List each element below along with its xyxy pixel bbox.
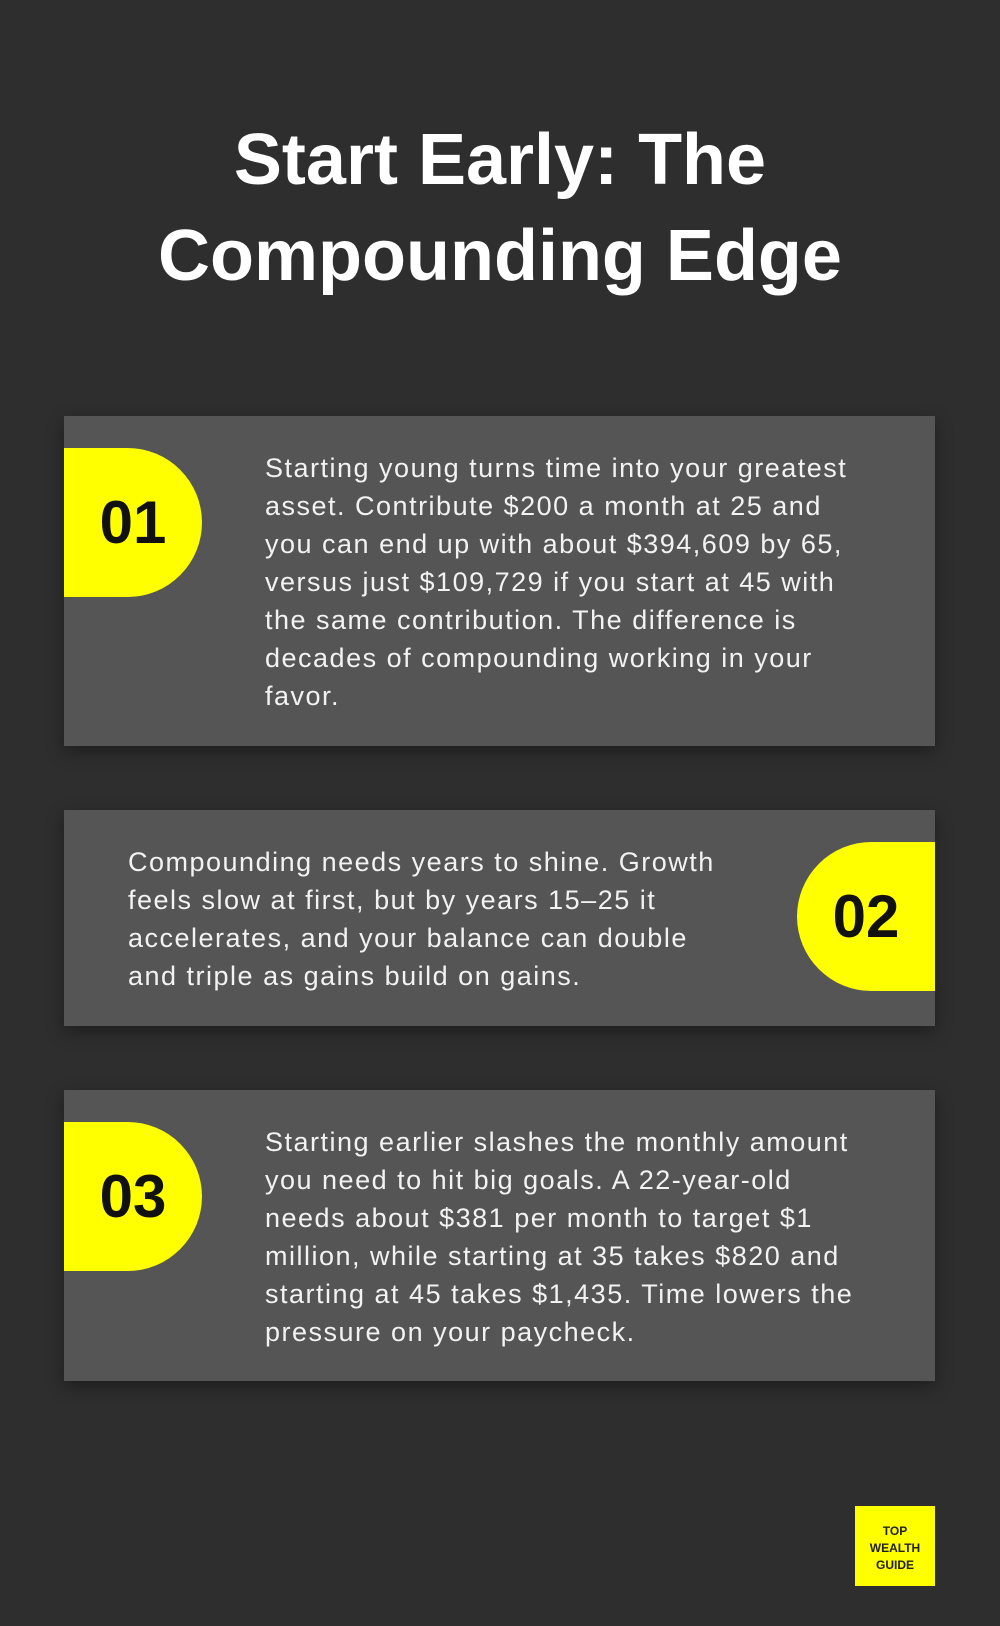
text 02: Compounding needs years to shine. Growth	[128, 847, 715, 877]
logo: GUIDE	[876, 1558, 914, 1572]
text 01: you can end up with about $394,609 by 65,	[265, 529, 843, 559]
logo	[855, 1506, 935, 1586]
logo: TOP	[883, 1524, 907, 1538]
title	[158, 120, 842, 296]
text 03: Starting earlier slashes the monthly amount	[265, 1127, 849, 1157]
text 01: the same contribution. The difference is	[265, 605, 797, 635]
badge 02: 02	[833, 883, 899, 950]
text 03: million, while starting at 35 takes $820 and	[265, 1241, 840, 1271]
badge 03	[64, 1122, 202, 1271]
panel: 03	[64, 1090, 935, 1381]
text 03: needs about $381 per month to target $1	[265, 1203, 813, 1233]
text 02: accelerates, and your balance can double	[128, 923, 688, 953]
panel: 02	[64, 810, 935, 1026]
text 01: Starting young turns time into your greatest	[265, 453, 847, 483]
title: Start Early: The	[234, 120, 766, 200]
badge 01: 01	[100, 489, 166, 556]
text 02	[128, 847, 715, 991]
text 03: you need to hit big goals. A 22-year-old	[265, 1165, 792, 1195]
title: Compounding Edge	[158, 216, 842, 296]
text 01	[265, 453, 847, 711]
text 03	[265, 1127, 853, 1347]
text 03: starting at 45 takes $1,435. Time lowers the	[265, 1279, 853, 1309]
text 01: versus just $109,729 if you start at 45 with	[265, 567, 835, 597]
text 02: feels slow at first, but by years 15–25 it	[128, 885, 656, 915]
badge 01	[64, 448, 202, 597]
logo: WEALTH	[870, 1541, 920, 1555]
badge 03: 03	[100, 1163, 166, 1230]
badge 02	[797, 842, 935, 991]
panel: 01	[64, 416, 935, 746]
text 01: decades of compounding working in your	[265, 643, 813, 673]
text 02: and triple as gains build on gains.	[128, 961, 581, 991]
text 03: pressure on your paycheck.	[265, 1317, 636, 1347]
text 01: favor.	[265, 681, 340, 711]
text 01: asset. Contribute $200 a month at 25 and	[265, 491, 822, 521]
